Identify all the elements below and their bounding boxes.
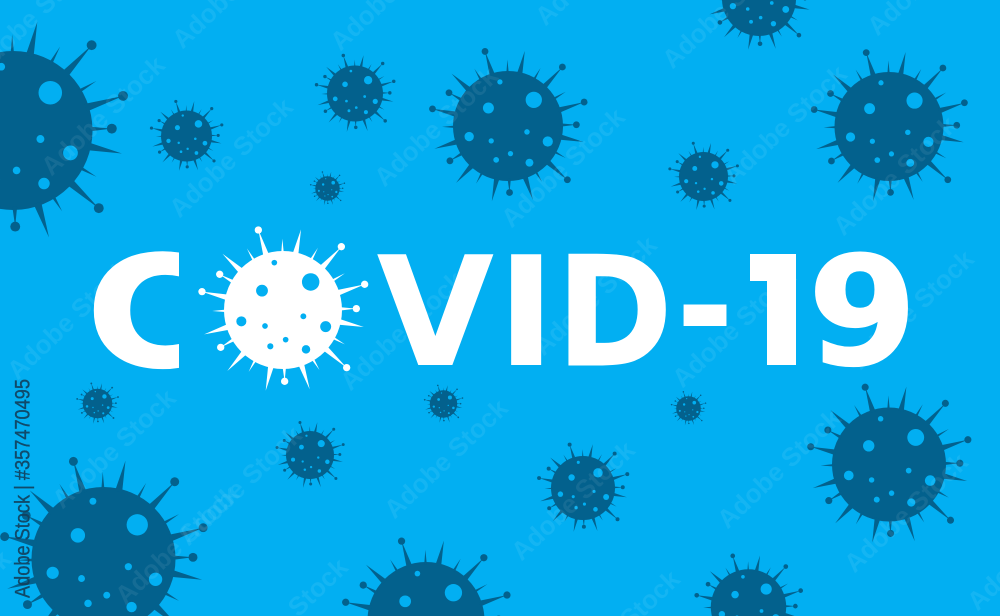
vertical stock credit: Adobe Stock | #357470495 bbox=[12, 379, 34, 598]
watermark: Adobe Stock pattern: Adobe Stock bbox=[46, 382, 182, 514]
virus: cropped top right bbox=[706, 0, 813, 50]
watermark: Adobe Stock pattern: Adobe Stock bbox=[109, 478, 245, 610]
watermark: Adobe Stock pattern: Adobe Stock bbox=[711, 402, 847, 534]
virus: small upper left bbox=[150, 100, 223, 171]
watermark: Adobe Stock pattern: Adobe Stock bbox=[163, 91, 299, 223]
virus: large top left bbox=[0, 18, 128, 240]
virus: cropped bottom right bbox=[694, 554, 803, 616]
virus: large top right bbox=[811, 49, 968, 202]
virus: small lower centre right bbox=[537, 443, 629, 532]
watermark: Adobe Stock pattern: Adobe Stock bbox=[35, 49, 171, 181]
watermark: Adobe Stock pattern: Adobe Stock bbox=[527, 229, 663, 361]
virus: small right of centre bbox=[668, 142, 739, 210]
letter D: D bbox=[556, 224, 673, 401]
virus: large bottom left bbox=[0, 457, 208, 616]
watermark: Adobe Stock pattern: Adobe Stock bbox=[838, 446, 974, 578]
icon: white virus as the letter O bbox=[198, 226, 368, 391]
watermark: Adobe Stock pattern: Adobe Stock bbox=[172, 419, 308, 551]
virus: small upper centre bbox=[315, 54, 395, 132]
watermark: Adobe Stock pattern: Adobe Stock bbox=[717, 58, 853, 190]
hyphen: - bbox=[676, 218, 734, 395]
letter V: V bbox=[376, 224, 494, 401]
title: COVID-19 bbox=[94, 226, 908, 390]
digit 1 bbox=[750, 254, 796, 365]
watermark: Adobe Stock pattern: Adobe Stock bbox=[368, 60, 504, 192]
watermark: Adobe Stock pattern: Adobe Stock bbox=[827, 109, 963, 241]
watermark: Adobe Stock pattern: Adobe Stock bbox=[666, 261, 802, 393]
virus: tiny lower left bbox=[76, 383, 119, 424]
virus: tiny upper centre bbox=[310, 171, 345, 205]
watermark: Adobe Stock pattern: Adobe Stock bbox=[334, 264, 470, 396]
letter C: C bbox=[87, 225, 212, 402]
virus: large top centre bbox=[429, 48, 588, 202]
digit 1: 1 bbox=[730, 224, 835, 401]
digit 9: 9 bbox=[808, 225, 917, 400]
letter I: I bbox=[496, 224, 556, 401]
watermark: Adobe Stock pattern: Adobe Stock bbox=[844, 243, 980, 375]
virus: large lower right bbox=[807, 384, 971, 543]
virus: cropped bottom centre bbox=[342, 538, 511, 616]
watermark: Adobe Stock pattern: Adobe Stock bbox=[505, 434, 641, 566]
watermark: Adobe Stock pattern: Adobe Stock bbox=[495, 101, 631, 233]
virus: tiny lower centre bbox=[424, 385, 463, 423]
watermark: Adobe Stock pattern: Adobe Stock bbox=[378, 392, 514, 524]
virus: small lower left bbox=[276, 421, 345, 488]
watermark: Adobe Stock pattern: Adobe Stock bbox=[1, 253, 137, 385]
virus: tiny lower right bbox=[671, 391, 706, 425]
